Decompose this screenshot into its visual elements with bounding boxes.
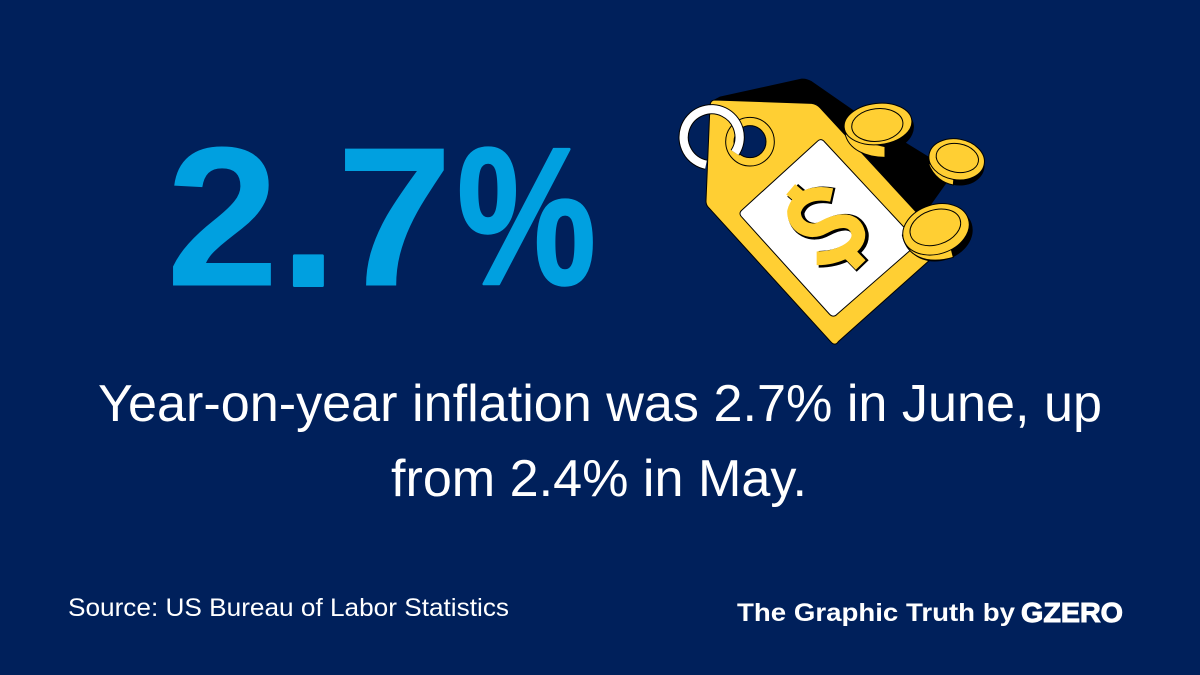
- headline text: from 2.4% in May.: [391, 450, 807, 508]
- tag label panel: [740, 140, 919, 316]
- tag shadow: [712, 79, 947, 212]
- coin 2: [926, 134, 988, 190]
- headline text: Year-on-year inflation was 2.7% in June, up: [98, 375, 1102, 433]
- tag eyelet: [726, 117, 774, 166]
- icon: price tag with dollar sign and coins: [684, 79, 988, 344]
- dollar sign: [791, 189, 863, 266]
- tag body: [706, 100, 947, 344]
- big number: 2.7%: 2: [166, 106, 279, 328]
- big number: 2.7%: %: [457, 107, 596, 326]
- coin 1: [842, 100, 916, 157]
- brand credit: GZERO: [1021, 597, 1123, 628]
- big number: 2.7%: 7: [336, 106, 453, 328]
- brand credit: The Graphic Truth by: [737, 599, 1015, 627]
- big number: 2.7%: [166, 106, 596, 328]
- headline text: [98, 375, 1102, 508]
- white ring: [684, 109, 740, 165]
- brand credit: [737, 597, 1123, 628]
- big number: 2.7%: .: [281, 106, 336, 328]
- coin 3: [896, 195, 980, 270]
- source note: Source: US Bureau of Labor Statistics: [68, 594, 509, 622]
